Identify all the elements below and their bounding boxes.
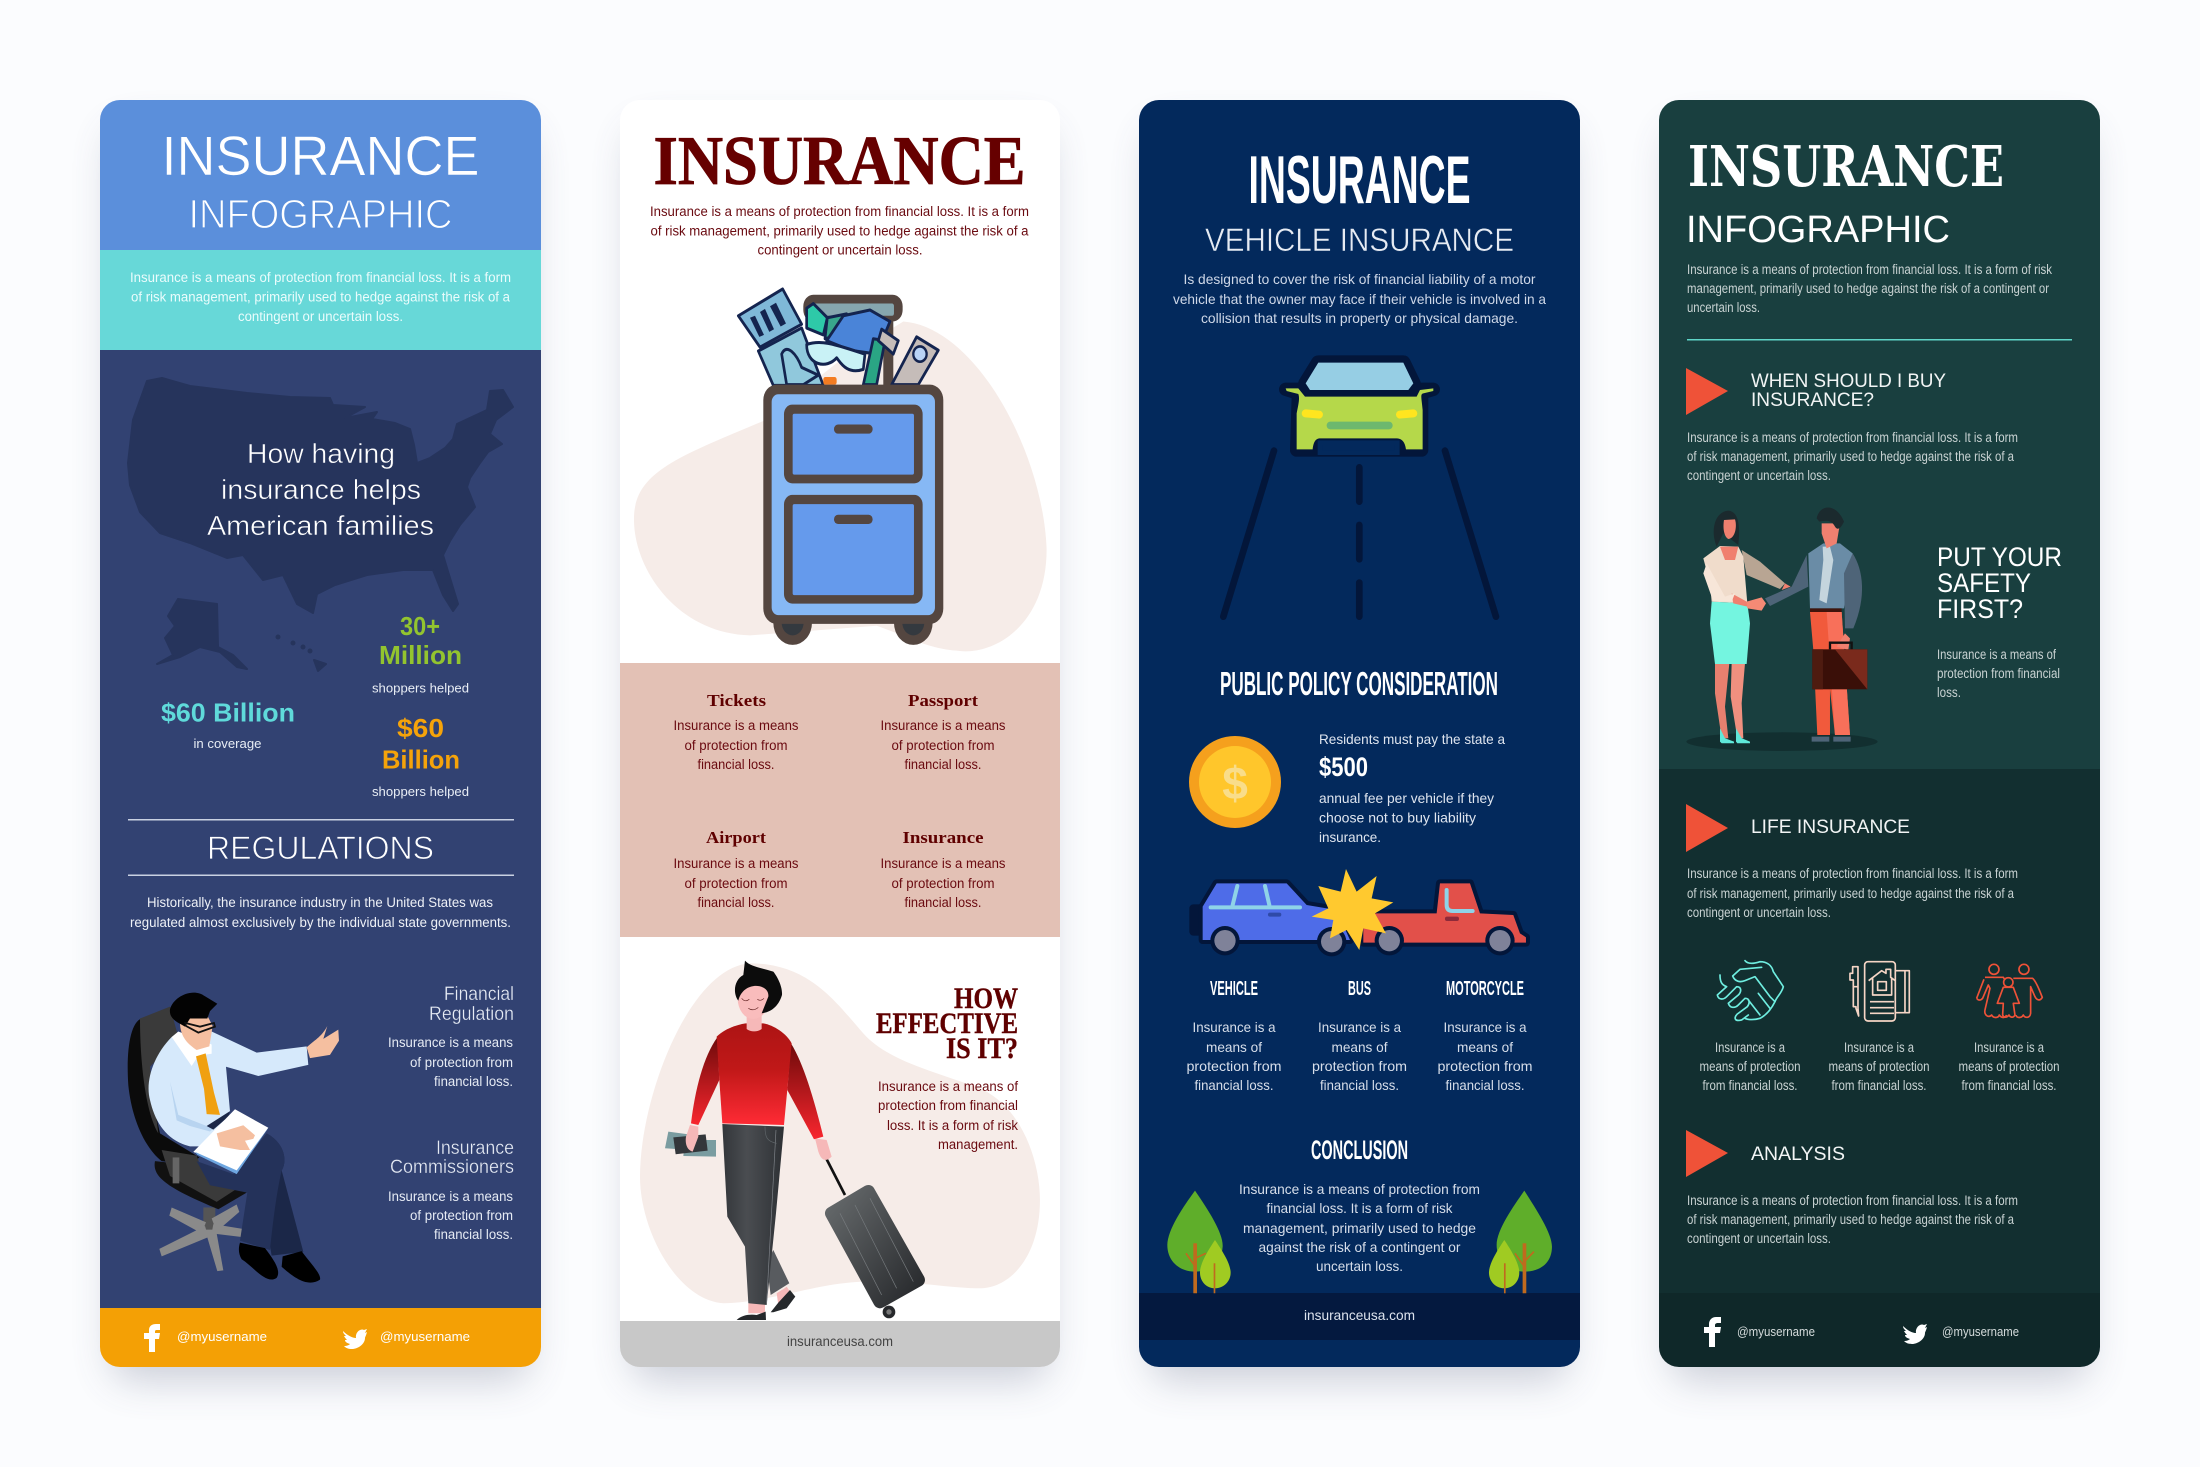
intro text (1687, 262, 2052, 315)
title (166, 136, 477, 228)
column: motorcycle (1438, 978, 1532, 1093)
intro text: of risk management, primarily used to hedge against the risk of a (131, 290, 510, 304)
column: bus: means of (1332, 1039, 1388, 1055)
column text three (1958, 1040, 2060, 1093)
column: motorcycle: Insurance is a (1444, 1019, 1527, 1035)
heading: life insurance: LIFE INSURANCE (1751, 817, 1910, 838)
footer handle: twitter: @myusername (1942, 1325, 2019, 1339)
panel: blue insurance infographic (100, 100, 541, 1367)
column: motorcycle: protection from (1438, 1058, 1532, 1074)
text: analysis: contingent or uncertain loss. (1687, 1231, 1831, 1246)
heading: when should i buy (1751, 371, 1946, 411)
card: insurance: financial loss. (904, 895, 982, 910)
column text three: means of protection (1958, 1059, 2060, 1074)
heading: when should i buy: INSURANCE? (1751, 390, 1874, 411)
conclusion text: uncertain loss. (1316, 1258, 1403, 1274)
card: airport: financial loss. (698, 895, 774, 910)
text: insurance commissioners: of protection from (410, 1208, 513, 1223)
intro text: Insurance is a means of protection from financial loss. It is a form (130, 270, 511, 285)
map heading: American families (207, 510, 434, 541)
icon: red arrow three (1686, 1130, 1728, 1177)
text: life insurance: of risk management, primarily used to hedge against the risk of a (1687, 886, 2014, 901)
stat: 30+ million: 30+ (400, 611, 440, 641)
intro text: uncertain loss. (1687, 300, 1760, 315)
card: tickets: financial loss. (698, 757, 774, 772)
illustration: trees right (1489, 1191, 1552, 1293)
card: passport: Passport (908, 691, 978, 710)
column: vehicle: means of (1206, 1039, 1262, 1055)
text: safety: protection from financial (1937, 666, 2060, 681)
illustration: filing cabinet with travel items (634, 289, 1047, 651)
text: insurance commissioners: Insurance is a means (388, 1189, 513, 1204)
footer url: insuranceusa.com (1304, 1307, 1415, 1323)
fee text: insurance. (1319, 829, 1381, 845)
intro text: contingent or uncertain loss. (758, 242, 922, 258)
fee text (1319, 731, 1505, 845)
text: effectiveness: protection from financial (878, 1098, 1018, 1113)
card: passport: of protection from (892, 738, 994, 753)
icon: document with house (1850, 962, 1909, 1021)
card: airport: Insurance is a means (674, 856, 799, 871)
regulations heading: REGULATIONS (207, 830, 434, 866)
stat: $60 billion shoppers: shoppers helped (372, 784, 469, 799)
column: vehicle: Insurance is a (1192, 1019, 1276, 1035)
intro text (130, 270, 511, 324)
subtitle: VEHICLE INSURANCE (1205, 222, 1514, 258)
footer handle: facebook: @myusername (177, 1329, 267, 1344)
panel: navy vehicle insurance (1139, 100, 1580, 1367)
stat: $60 billion coverage: $60 Billion (161, 698, 295, 728)
column text two: means of protection (1828, 1059, 1930, 1074)
text: insurance commissioners: Insurance (436, 1138, 514, 1159)
column: vehicle: protection from (1186, 1058, 1282, 1074)
icon: red arrow one (1686, 368, 1728, 415)
text: safety: loss. (1937, 685, 1961, 700)
fee text: annual fee per vehicle if they (1319, 790, 1494, 806)
stat: $60 billion shoppers (372, 713, 469, 799)
stat: $60 billion shoppers: $60 (397, 713, 444, 743)
column: bus: financial loss. (1320, 1077, 1399, 1093)
column text one (1700, 1040, 1800, 1093)
title: INSURANCE (1248, 142, 1470, 218)
conclusion text (1239, 1181, 1480, 1274)
text: effectiveness: management. (938, 1137, 1018, 1152)
column: bus: BUS (1348, 978, 1371, 1000)
text: effectiveness: Insurance is a means of (878, 1079, 1018, 1094)
column text two: from financial loss. (1832, 1078, 1926, 1093)
heading: how effective is it (876, 988, 1018, 1058)
stat: 30+ million: Million (379, 640, 462, 670)
heading: put your safety first: FIRST? (1937, 594, 2023, 624)
illustration: traveller with suitcase (640, 961, 1040, 1320)
text: effectiveness (878, 1079, 1018, 1152)
heading: put your safety first (1937, 542, 2062, 624)
intro text: contingent or uncertain loss. (238, 309, 403, 324)
regulations text: Historically, the insurance industry in the United States was (147, 895, 493, 910)
column text one: Insurance is a (1715, 1040, 1785, 1055)
column: vehicle: financial loss. (1194, 1077, 1274, 1093)
conclusion text: financial loss. It is a form of risk (1266, 1200, 1453, 1216)
regulations text (130, 895, 511, 930)
card: passport: Insurance is a means (880, 718, 1006, 733)
text: when to buy (1687, 430, 2018, 483)
icon: handshake outline (1717, 961, 1783, 1020)
text: insurance commissioners: financial loss. (434, 1227, 513, 1242)
text: analysis: Insurance is a means of protection from financial loss. It is a form (1687, 1193, 2018, 1208)
column text three: Insurance is a (1974, 1040, 2044, 1055)
card: insurance: Insurance (902, 828, 984, 847)
illustration: car crash (1193, 869, 1526, 956)
illustration: handshake (1686, 507, 1878, 751)
panel: dark green insurance infographic (1659, 100, 2100, 1367)
text: financial regulation: Financial (444, 984, 514, 1005)
card: passport: financial loss. (904, 757, 982, 772)
text: financial regulation: Regulation (429, 1004, 514, 1025)
heading: put your safety first: PUT YOUR (1937, 542, 2062, 572)
footer url: insuranceusa.com (787, 1333, 893, 1349)
card: tickets: Insurance is a means (674, 718, 799, 733)
text: effectiveness: loss. It is a form of risk (887, 1118, 1018, 1133)
stat: 30+ million (372, 611, 469, 696)
panel: white insurance infographic (620, 100, 1060, 1367)
intro text: Insurance is a means of protection from financial loss. It is a form (650, 204, 1029, 219)
icon: facebook (1704, 1317, 1721, 1347)
icon: facebook (144, 1324, 160, 1352)
column: bus (1312, 978, 1407, 1093)
intro text: management, primarily used to hedge against the risk of a contingent or (1687, 281, 2049, 296)
heading: how effective is it: HOW (954, 982, 1018, 1015)
icon: gold coin (1189, 736, 1281, 828)
column text one: from financial loss. (1702, 1078, 1798, 1093)
column: motorcycle: MOTORCYCLE (1446, 978, 1524, 1000)
title: INFOGRAPHIC (188, 191, 452, 237)
map heading: How having (247, 438, 395, 469)
stat: $60 billion coverage: in coverage (194, 736, 262, 751)
title: INSURANCE (1688, 134, 2004, 200)
map of the United States (128, 378, 513, 671)
map heading: insurance helps (221, 474, 421, 505)
title: INSURANCE (654, 123, 1026, 200)
heading: how effective is it: EFFECTIVE (876, 1007, 1018, 1040)
intro text (650, 204, 1029, 258)
text: life insurance (1687, 866, 2018, 920)
footer handle: facebook: @myusername (1737, 1325, 1815, 1339)
regulations text: regulated almost exclusively by the individual state governments. (130, 915, 511, 930)
card: airport: Airport (706, 828, 766, 847)
icon: twitter (1903, 1324, 1927, 1344)
heading: analysis: ANALYSIS (1751, 1144, 1845, 1165)
text: financial regulation (388, 984, 514, 1089)
intro text: vehicle that the owner may face if their vehicle is involved in a (1173, 291, 1546, 307)
card: tickets: of protection from (684, 738, 788, 753)
card: passport (880, 691, 1006, 772)
conclusion text: against the risk of a contingent or (1258, 1239, 1461, 1255)
map heading (207, 443, 433, 536)
column: motorcycle: financial loss. (1446, 1077, 1524, 1093)
illustration: trees left (1167, 1191, 1231, 1293)
intro text: Insurance is a means of protection from financial loss. It is a form of risk (1687, 262, 2052, 277)
title: INFOGRAPHIC (1686, 209, 1950, 251)
column text three: from financial loss. (1962, 1078, 2056, 1093)
conclusion text: management, primarily used to hedge (1243, 1220, 1476, 1236)
text: analysis: of risk management, primarily used to hedge against the risk of a (1687, 1212, 2014, 1227)
card: airport: of protection from (684, 876, 788, 891)
card: insurance: Insurance is a means (880, 856, 1006, 871)
text: life insurance: contingent or uncertain loss. (1687, 905, 1831, 920)
text: analysis (1687, 1193, 2018, 1246)
heading: conclusion: CONCLUSION (1311, 1135, 1408, 1165)
intro text: of risk management, primarily used to hedge against the risk of a (650, 224, 1029, 238)
illustration: car on road (1223, 363, 1496, 617)
heading: how effective is it: IS IT? (946, 1032, 1018, 1065)
icon: red arrow two (1686, 804, 1728, 852)
card: insurance (880, 828, 1006, 910)
text: when to buy: contingent or uncertain loss. (1687, 468, 1831, 483)
heading: put your safety first: SAFETY (1937, 568, 2031, 598)
stat: $60 billion shoppers: Billion (382, 744, 460, 774)
stat: 30+ million: shoppers helped (372, 680, 469, 696)
title: INSURANCE (162, 124, 480, 187)
text: financial regulation: Insurance is a means (388, 1035, 513, 1050)
intro text: Is designed to cover the risk of financial liability of a motor (1184, 271, 1536, 287)
text: insurance commissioners (388, 1138, 514, 1242)
column: motorcycle: means of (1457, 1039, 1513, 1055)
column text two: Insurance is a (1844, 1040, 1914, 1055)
text: financial regulation: financial loss. (434, 1074, 513, 1089)
title (1686, 134, 2004, 251)
column: vehicle: VEHICLE (1210, 978, 1258, 1000)
icon: twitter (343, 1329, 367, 1349)
column text two (1828, 1040, 1930, 1093)
text: financial regulation: of protection from (410, 1055, 513, 1070)
fee text: choose not to buy liability (1319, 810, 1476, 826)
text: when to buy: Insurance is a means of protection from financial loss. It is a form (1687, 430, 2018, 445)
heading: when should i buy: WHEN SHOULD I BUY (1751, 371, 1946, 392)
icon: family (1977, 964, 2042, 1017)
conclusion text: Insurance is a means of protection from (1239, 1181, 1480, 1197)
heading: public policy consideration: PUBLIC POLICY CONSIDERATION (1220, 665, 1498, 702)
text: when to buy: of risk management, primarily used to hedge against the risk of a (1687, 449, 2014, 464)
fee text: $500 (1319, 752, 1368, 782)
column: bus: protection from (1312, 1058, 1407, 1074)
text: life insurance: Insurance is a means of protection from financial loss. It is a form (1687, 866, 2018, 881)
illustration: man in office chair (128, 993, 339, 1283)
icon: gold coin: $ (1222, 757, 1248, 809)
card: insurance: of protection from (892, 876, 994, 891)
text: insurance commissioners: Commissioners (390, 1157, 514, 1178)
text: safety (1937, 647, 2060, 700)
intro text: collision that results in property or physical damage. (1201, 310, 1518, 326)
card: tickets: Tickets (707, 691, 766, 710)
card: airport (674, 828, 799, 910)
column: vehicle (1186, 978, 1282, 1093)
intro text (1173, 271, 1546, 326)
column: bus: Insurance is a (1318, 1019, 1401, 1035)
fee text: Residents must pay the state a (1319, 731, 1505, 747)
column text one: means of protection (1700, 1059, 1800, 1074)
footer handle: twitter: @myusername (380, 1329, 470, 1344)
text: safety: Insurance is a means of (1937, 647, 2056, 662)
card: tickets (674, 691, 799, 772)
stat: $60 billion coverage (161, 702, 294, 750)
